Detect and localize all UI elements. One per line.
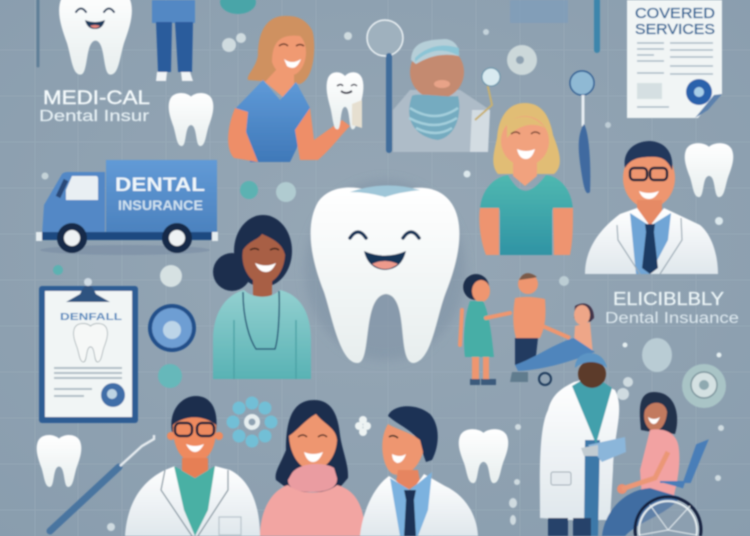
figure: dentist with glasses, bottom-left xyxy=(125,396,260,536)
icon: speckles centre right xyxy=(464,29,723,225)
figure: woman in blue holding tooth xyxy=(228,16,363,162)
icon: flower xyxy=(226,396,278,448)
figure: woman in pink sweater xyxy=(260,400,365,536)
truck: dental insurance xyxy=(36,160,218,255)
icon: dental scaler tool xyxy=(50,435,154,531)
icon: round silver badge xyxy=(682,364,726,408)
figure: masked dental worker xyxy=(393,39,500,152)
heading: eligibility dental insurance xyxy=(605,289,739,327)
icon: small bubbles lower right xyxy=(107,377,724,531)
icon: round blue badge xyxy=(148,304,196,352)
icon: blue tool top xyxy=(594,0,600,50)
figure: blonde woman in teal xyxy=(479,103,573,255)
heading: Medi-Cal Dental Insur xyxy=(39,87,150,125)
heading: eligibility dental insurance: ELICIBLBLY xyxy=(613,289,724,309)
icon: mirror toothbrush xyxy=(570,71,594,193)
icon: smiling tooth top-left xyxy=(59,0,132,75)
heading: eligibility dental insurance: Dental Insuance xyxy=(605,310,739,327)
document: covered services xyxy=(627,0,722,118)
truck: dental insurance: INSURANCE xyxy=(118,198,203,213)
figure: smiling man, bottom centre xyxy=(360,406,478,536)
icon: small white flower xyxy=(355,416,371,436)
figure: doctor with tablet xyxy=(540,353,626,536)
icon: plain tooth xyxy=(169,93,213,146)
icon: dental mirror xyxy=(367,20,403,150)
figure: person in blue, legs xyxy=(152,0,195,81)
figure: woman in mint top xyxy=(213,215,311,379)
icon: translucent blob and speckles xyxy=(559,276,722,372)
figure: woman in wheelchair xyxy=(602,392,707,536)
document: covered services: COVERED xyxy=(635,6,715,22)
icon: white speckle xyxy=(222,32,352,52)
clipboard: dental form xyxy=(39,278,138,423)
figure: dentist with glasses xyxy=(585,141,718,274)
icon: tooth right xyxy=(685,143,733,197)
icon: teal and white blobs xyxy=(42,172,296,202)
document: covered services: SERVICES xyxy=(635,22,715,38)
icon: tooth bottom-left xyxy=(37,435,81,487)
icon: tooth bottom centre-right xyxy=(459,429,508,483)
icon: white ring blob xyxy=(507,45,537,75)
figure group: children and wheelchair xyxy=(460,273,595,385)
central smiling tooth xyxy=(305,180,465,363)
icon: top-left dental probe xyxy=(36,0,40,66)
clipboard: dental form: DENFALL xyxy=(60,311,123,323)
icon: tall rectangle top xyxy=(510,0,568,23)
icon: small blobs left xyxy=(53,265,182,388)
truck: dental insurance: DENTAL xyxy=(115,175,205,196)
heading: Medi-Cal Dental Insur: Dental Insur xyxy=(39,108,150,125)
heading: Medi-Cal Dental Insur: MEDI-CAL xyxy=(43,87,150,109)
icon: teal blob xyxy=(220,0,256,14)
